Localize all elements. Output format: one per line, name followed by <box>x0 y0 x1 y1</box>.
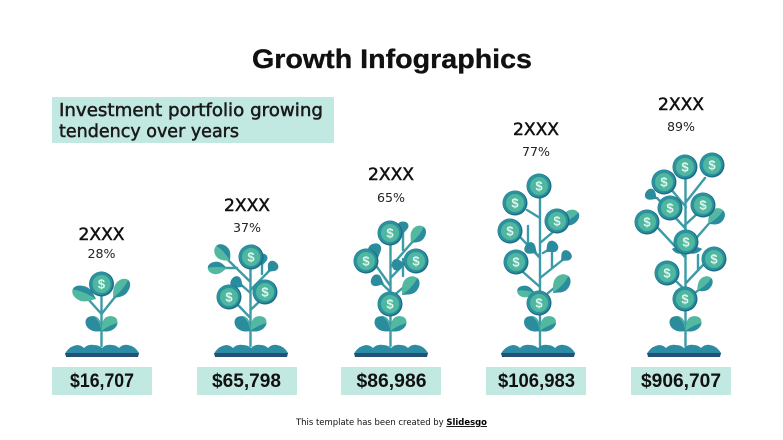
plant 5: $ <box>710 252 718 266</box>
column 3 <box>341 165 441 395</box>
plant 5: $ <box>699 198 707 212</box>
column 3: 65% <box>377 190 405 205</box>
column 1: $16,707 <box>70 370 134 392</box>
plant 1 <box>65 272 139 357</box>
plant 4: $ <box>506 224 514 238</box>
column 4 <box>486 120 586 395</box>
plant 2: $ <box>261 284 269 300</box>
plant 3: $ <box>386 296 394 312</box>
column 5: 2XXX <box>658 95 704 115</box>
plant 4: $ <box>511 196 519 210</box>
plant 5: $ <box>666 200 674 216</box>
column 2: 2XXX <box>224 196 270 216</box>
plant 5 <box>634 152 728 357</box>
plant 1: $ <box>98 276 106 292</box>
plant 4: $ <box>535 178 543 194</box>
column 5: 89% <box>667 119 695 134</box>
footer credit: This template has been created by Slidesgo <box>295 418 487 428</box>
plant 4: $ <box>512 254 520 270</box>
plant 5: $ <box>643 214 651 230</box>
plant 3 <box>354 220 429 357</box>
plant 5: $ <box>681 292 689 306</box>
plant 3: $ <box>362 254 370 268</box>
plant 4: $ <box>553 214 561 228</box>
panel: subtitle <box>52 97 334 143</box>
plant 5: $ <box>708 158 716 172</box>
plant 5: $ <box>663 266 671 280</box>
column 4: $106,983 <box>498 370 575 392</box>
column 1: 2XXX <box>78 225 125 245</box>
column 4: 77% <box>522 144 550 159</box>
plant 5: $ <box>682 234 690 250</box>
column 1: 28% <box>88 246 116 261</box>
panel: subtitle: tendency over years <box>59 122 239 142</box>
plant 2 <box>208 241 288 357</box>
panel: subtitle: Investment portfolio growing <box>59 101 323 121</box>
plant 3: $ <box>386 226 394 240</box>
column 2: $65,798 <box>212 370 281 392</box>
plant 5: $ <box>660 174 668 190</box>
column 5: $906,707 <box>641 370 721 392</box>
column 4: 2XXX <box>513 120 559 140</box>
title: Growth Infographics <box>252 44 532 74</box>
plant 2: $ <box>225 290 233 304</box>
column 3: $86,986 <box>356 370 427 392</box>
column 2 <box>197 196 297 395</box>
plant 4 <box>498 174 582 357</box>
column 1 <box>52 225 152 395</box>
column 2: 37% <box>233 220 261 235</box>
plant 5: $ <box>681 160 689 174</box>
plant 2: $ <box>247 250 255 264</box>
column 3: 2XXX <box>368 165 414 185</box>
plant 3: $ <box>412 254 420 268</box>
plant 4: $ <box>535 296 543 310</box>
column 5 <box>631 95 731 395</box>
